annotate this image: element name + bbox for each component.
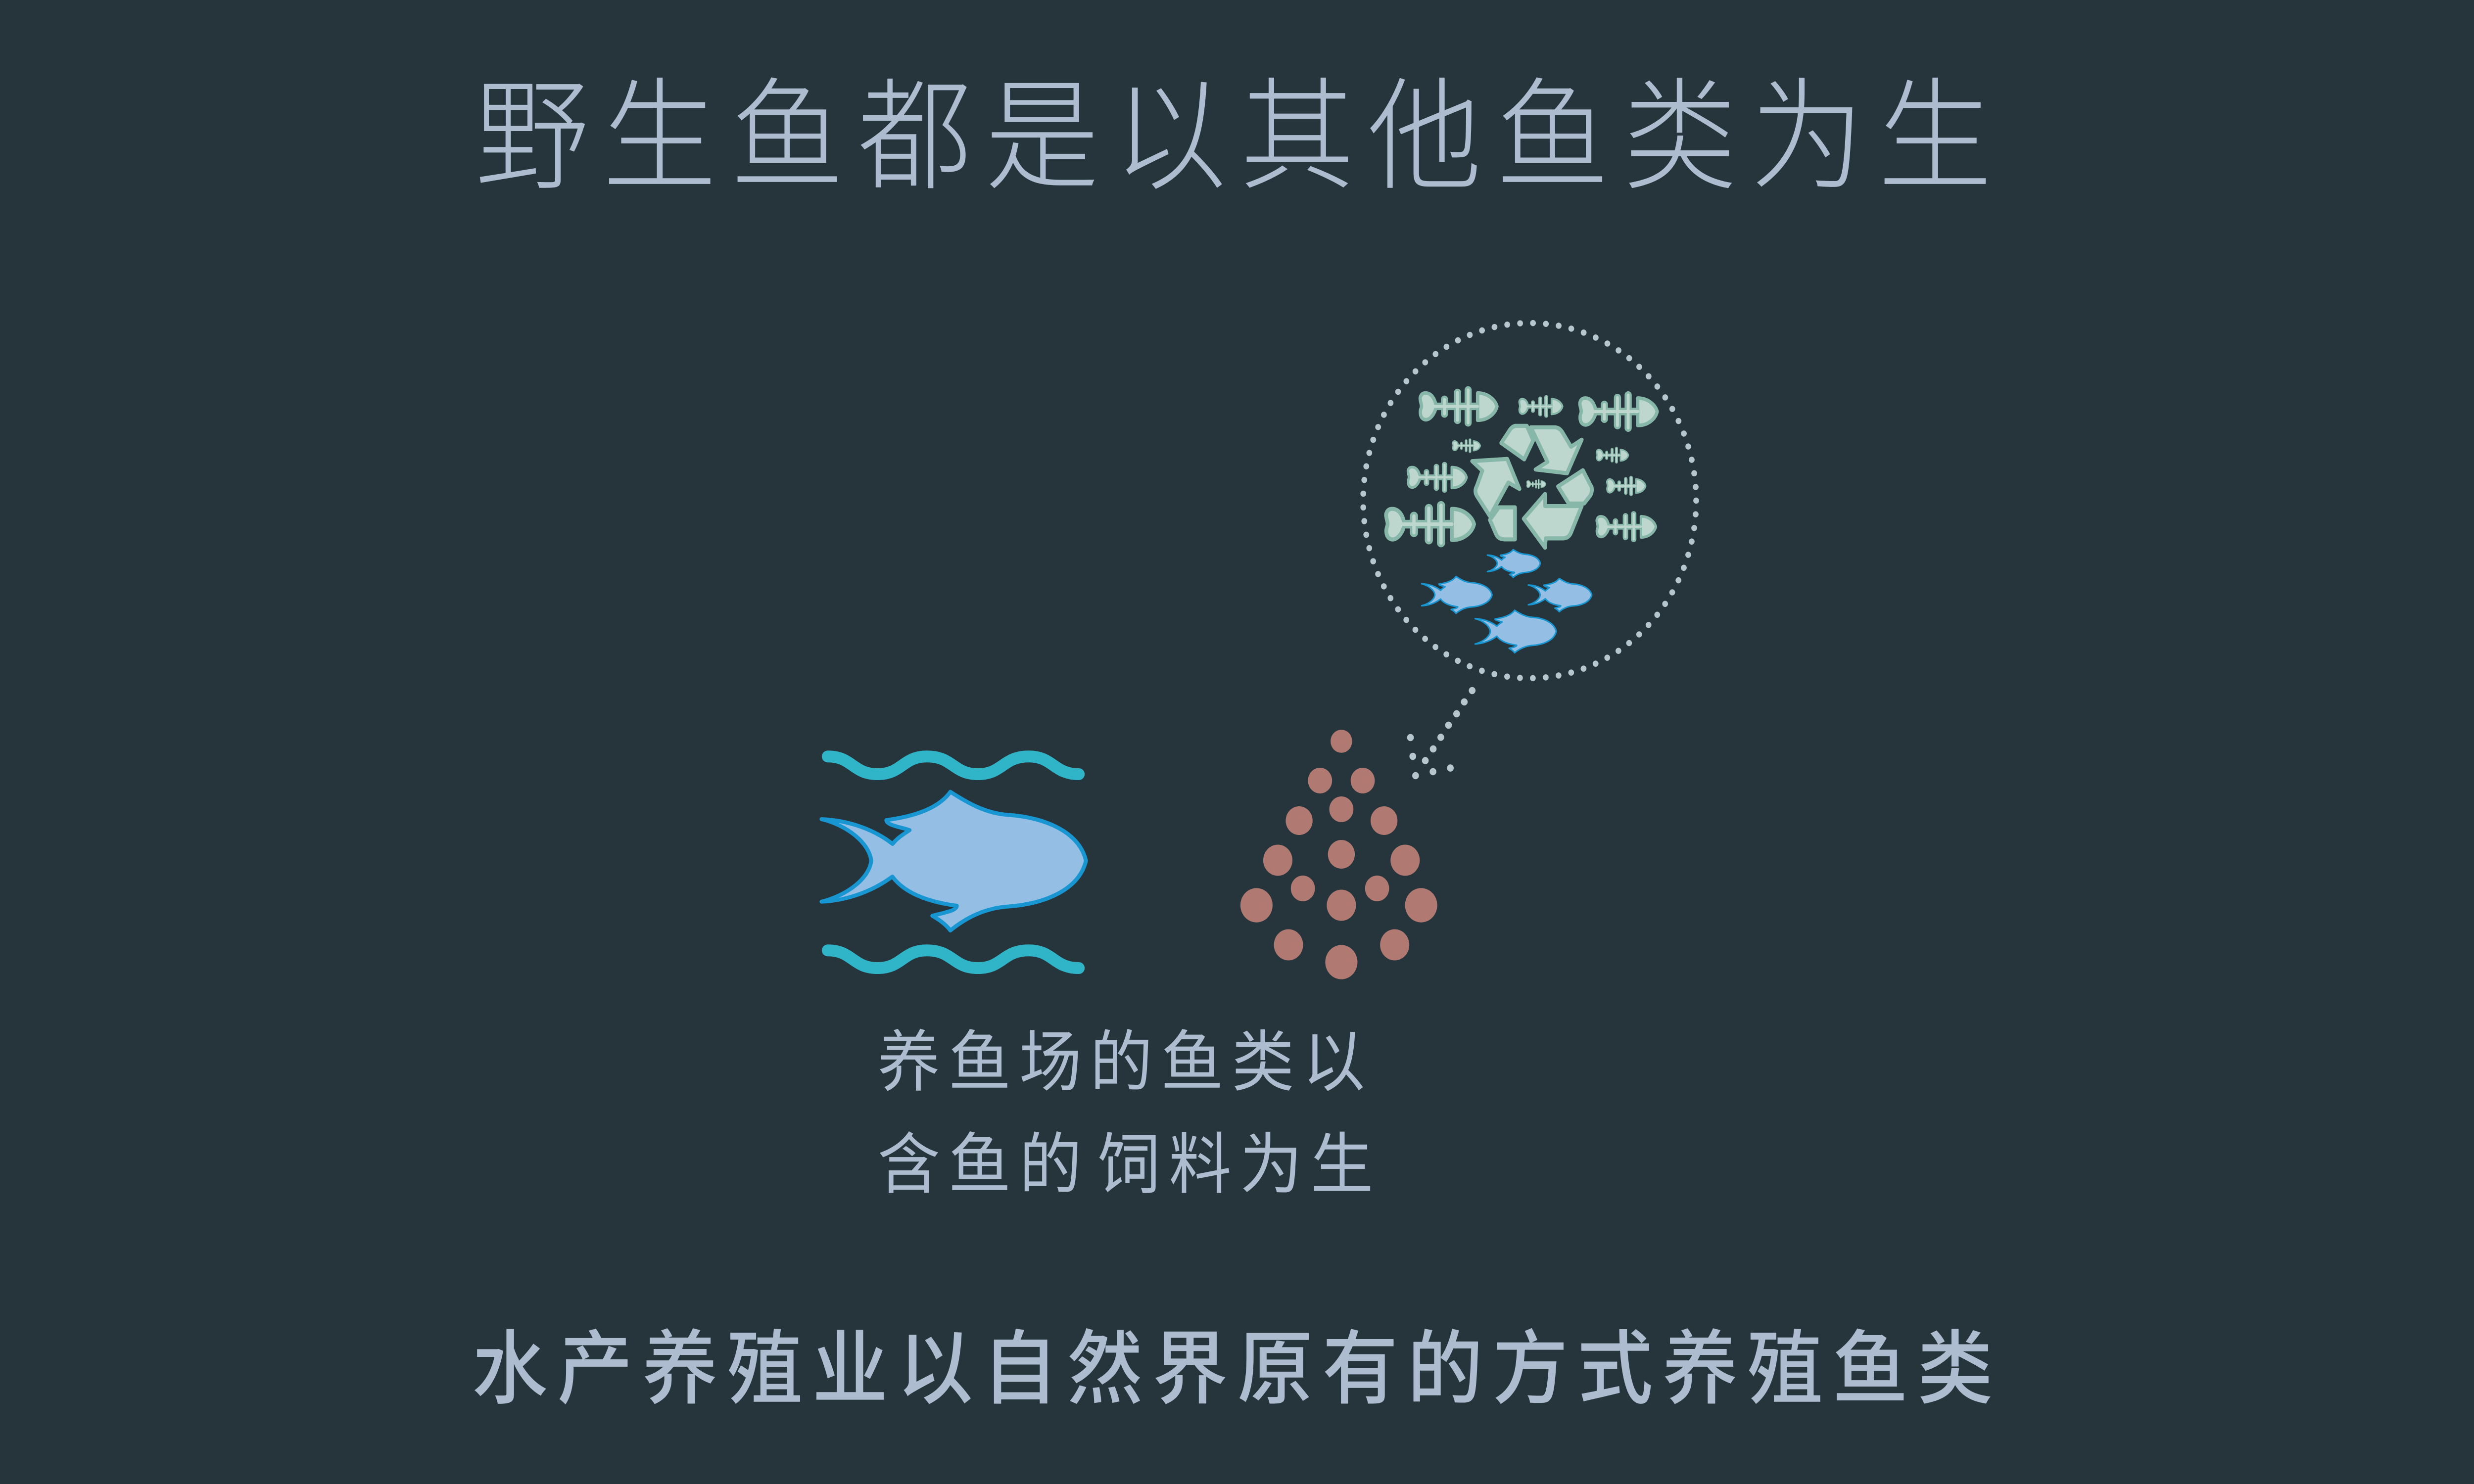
icon: fish skeletons — [1386, 390, 1657, 543]
arrow: dotted from feed contents to pellets — [1407, 687, 1475, 779]
icon: recycling symbol — [1472, 426, 1592, 548]
callout: feed contents — [1363, 323, 1696, 678]
icon: small fish school — [1422, 550, 1592, 653]
wave: bottom — [828, 950, 1079, 968]
icon: large fish — [821, 792, 1086, 930]
dotted circle outline — [1363, 323, 1696, 678]
illustration: farmed fish between waves — [821, 756, 1086, 968]
wave: top — [828, 756, 1079, 774]
footer statement: 水产养殖业以自然界原有的方式养殖鱼类 — [472, 1324, 2002, 1414]
title: 野生鱼都是以其他鱼类为生 — [475, 69, 2005, 205]
text block: farmed fish caption: 含鱼的饲料为生 — [878, 1127, 1374, 1202]
icon: feed pellets — [1240, 730, 1437, 979]
text block: farmed fish caption — [878, 1025, 1374, 1202]
text block: farmed fish caption: 养鱼场的鱼类以 — [878, 1025, 1365, 1100]
